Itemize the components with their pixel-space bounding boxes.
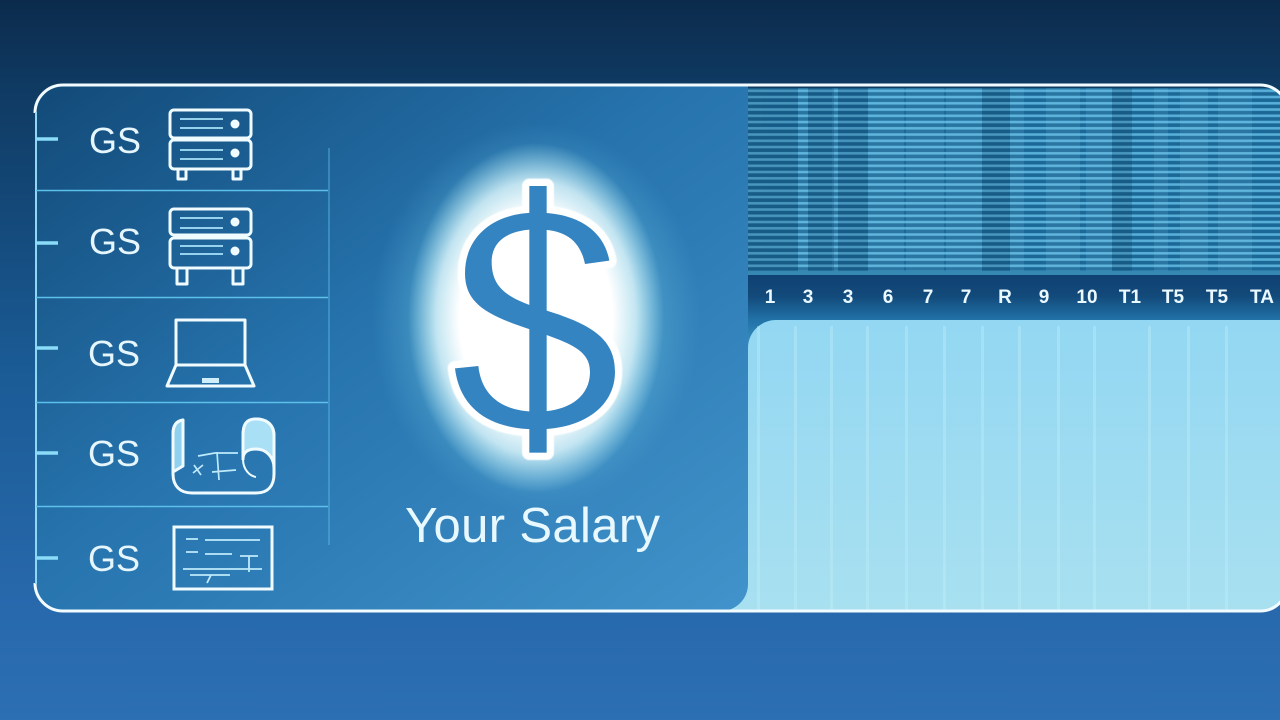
axis numbers: T1: [1119, 287, 1142, 308]
axis numbers: 7: [961, 287, 971, 308]
axis numbers: 3: [843, 287, 853, 308]
axis numbers: T5: [1206, 287, 1229, 308]
panel: left blue salary area: [35, 85, 748, 611]
list labels: GS: [88, 433, 140, 474]
dark number band: [748, 271, 1280, 352]
icon: server 1: [170, 110, 251, 179]
axis numbers: 3: [803, 287, 813, 308]
striped data grid: [748, 88, 1280, 272]
axis numbers: R: [998, 287, 1012, 308]
icon: laptop: [167, 320, 254, 386]
panel: main card: [35, 85, 1280, 615]
icon: document board: [174, 527, 272, 589]
card white outline: [35, 85, 1280, 611]
list: left column rules: [36, 112, 329, 584]
axis numbers: 1: [765, 287, 776, 308]
dollar white outline: [455, 186, 615, 453]
axis numbers: 10: [1076, 287, 1098, 308]
list labels: GS: [88, 333, 140, 374]
axis numbers: 9: [1039, 287, 1049, 308]
list labels: GS: [89, 221, 141, 262]
axis numbers: TA: [1250, 287, 1274, 308]
panel: right light area: [730, 584, 748, 610]
icon: server 2: [170, 209, 251, 284]
list labels: GS: [88, 538, 140, 579]
axis numbers: T5: [1162, 287, 1185, 308]
lower light table area: [748, 320, 1280, 612]
axis numbers: 6: [883, 287, 893, 308]
list labels: [88, 120, 141, 579]
axis numbers: [766, 290, 1274, 303]
axis numbers: 7: [923, 287, 933, 308]
icon: blueprint scroll: [173, 419, 274, 493]
icon: glowing dollar sign: [371, 123, 701, 513]
list labels: GS: [89, 120, 141, 161]
salary caption: Your Salary: [405, 499, 660, 553]
dollar blue fill: [455, 186, 615, 453]
